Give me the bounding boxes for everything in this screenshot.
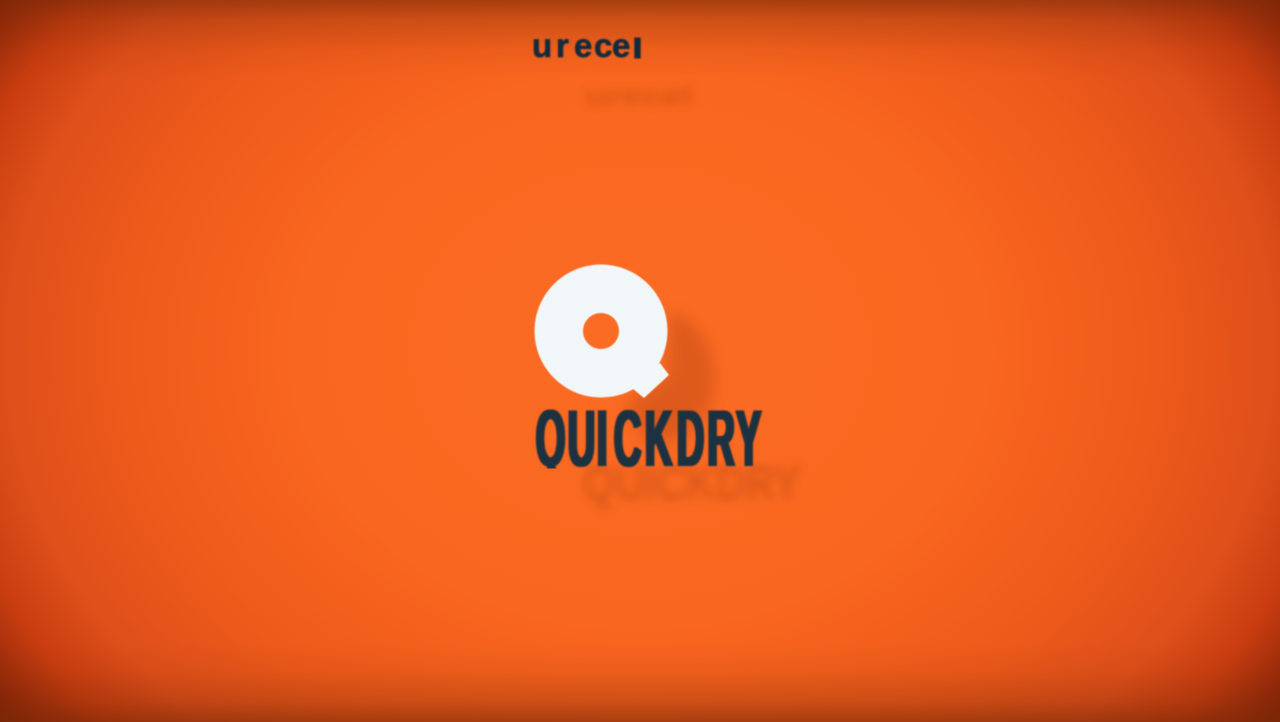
urecel wordmark: l <box>634 35 641 63</box>
icon: Q logo <box>535 264 669 398</box>
shadow of Q icon <box>625 312 714 445</box>
Q tail <box>632 363 669 398</box>
shadow of QUICKDRY wordmark: QUICKDRY <box>583 455 801 511</box>
urecel wordmark: urece <box>532 27 630 64</box>
shadow of urecel wordmark: urecel <box>585 83 692 110</box>
QUICKDRY wordmark: QUICKDRY <box>536 394 761 484</box>
